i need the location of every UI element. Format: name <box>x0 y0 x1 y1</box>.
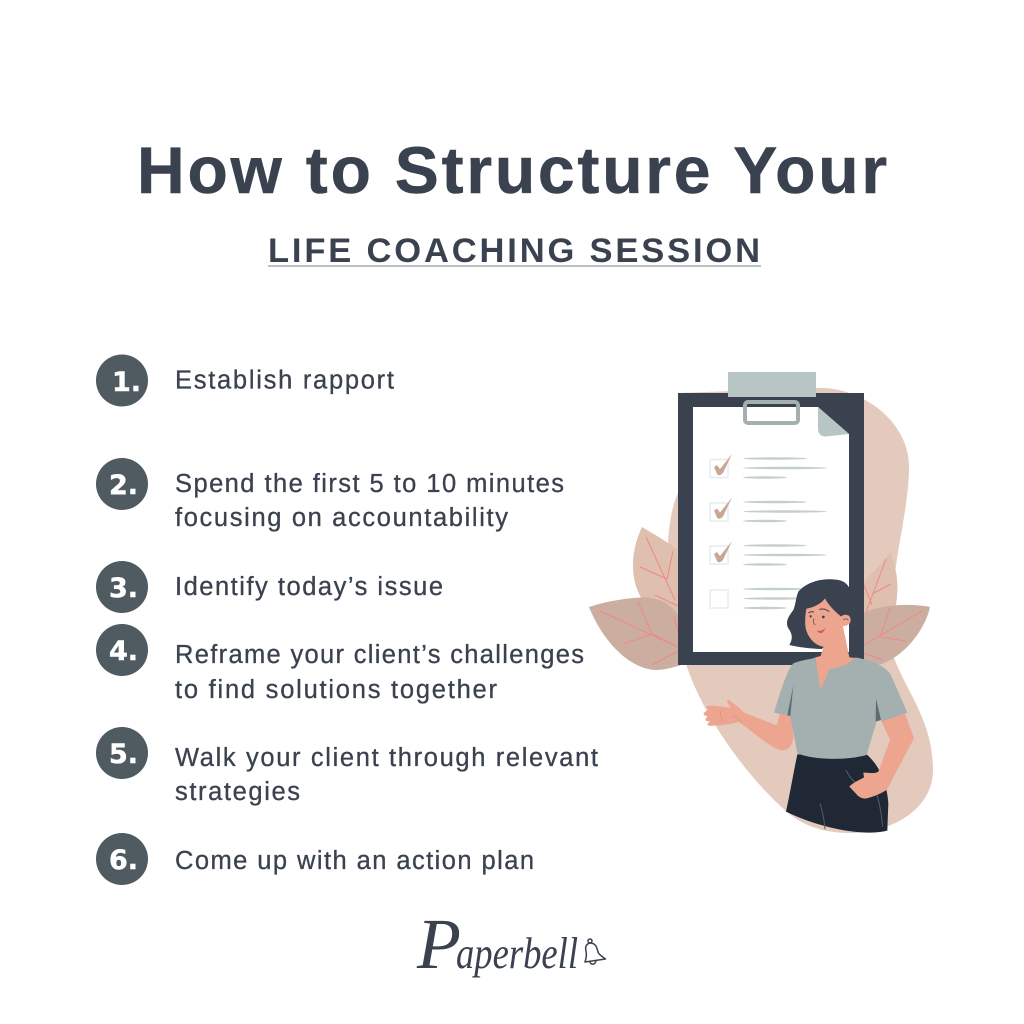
icon: bell <box>585 939 606 964</box>
step 2: focusing on accountability <box>175 504 508 532</box>
clipboard <box>678 372 864 665</box>
step 4 <box>96 624 584 704</box>
logo: Paperbell: aperbell <box>456 929 578 978</box>
logo: Paperbell: P <box>416 904 461 984</box>
pants <box>786 754 888 833</box>
hair <box>787 579 852 649</box>
logo: Paperbell <box>416 904 606 984</box>
step 3 <box>96 561 443 613</box>
step 2 <box>96 458 564 532</box>
checklist <box>710 454 827 609</box>
left arm <box>704 699 793 750</box>
subtitle: LIFE COACHING SESSION <box>268 232 760 270</box>
neck <box>815 620 855 691</box>
step 6 <box>96 833 534 885</box>
step 1: 1. <box>112 367 141 398</box>
step 6: 6. <box>109 845 138 876</box>
facial features <box>808 609 829 633</box>
shirt <box>774 657 907 759</box>
step 2: Spend the first 5 to 10 minutes <box>175 470 564 498</box>
background blob <box>668 388 933 833</box>
step 4: to find solutions together <box>175 676 498 704</box>
step 5: 5. <box>109 739 138 770</box>
step 6: Come up with an action plan <box>175 847 534 875</box>
step 3: 3. <box>109 573 138 604</box>
step 1: Establish rapport <box>175 366 394 394</box>
step 5 <box>96 727 598 806</box>
right arm <box>849 713 914 799</box>
step 1 <box>96 354 394 406</box>
step 4: 4. <box>109 636 138 667</box>
woman <box>704 579 914 833</box>
step 2: 2. <box>109 470 138 501</box>
step 4: Reframe your client’s challenges <box>175 641 584 669</box>
step 3: Identify today’s issue <box>175 573 443 601</box>
step 5: Walk your client through relevant <box>175 744 598 772</box>
title: How to Structure Your <box>137 133 887 207</box>
leaves <box>589 527 930 670</box>
face <box>805 598 841 647</box>
illustration: clipboard and coach <box>589 372 933 833</box>
step 5: strategies <box>175 778 300 806</box>
